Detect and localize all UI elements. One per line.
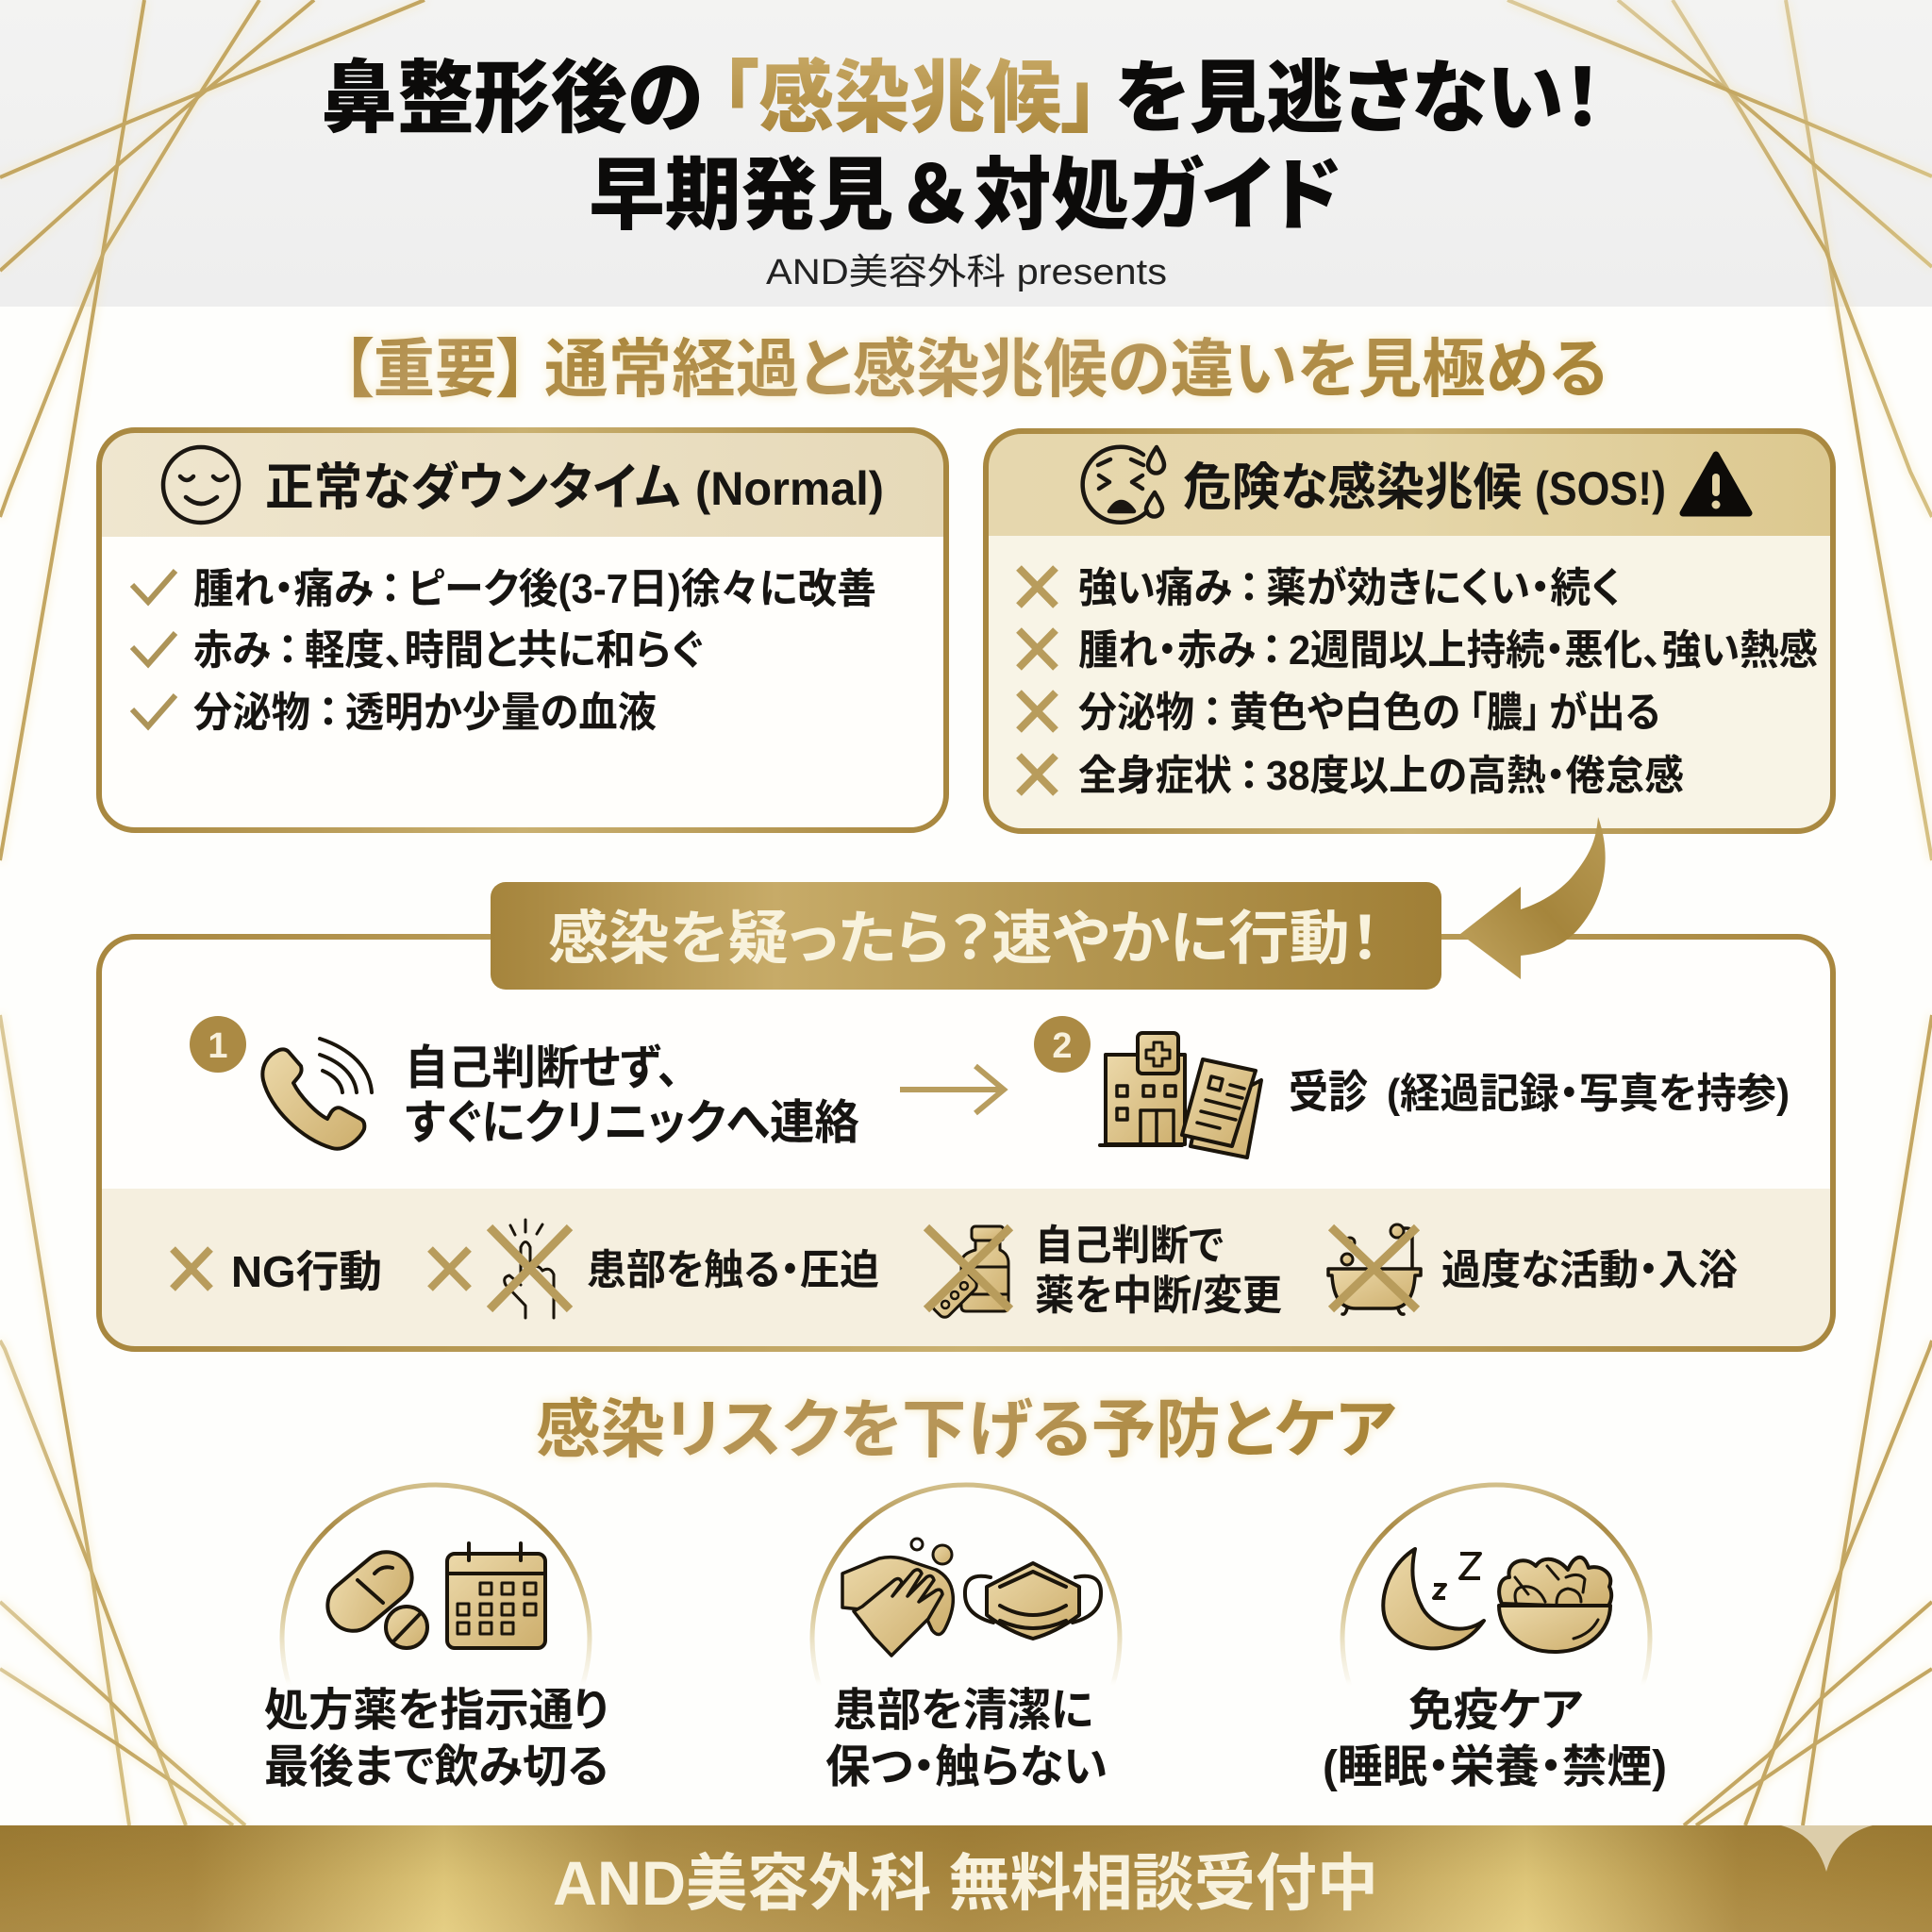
NG: touching	[430, 1220, 879, 1318]
care item: immunity	[1323, 1485, 1667, 1792]
icon: pills and calendar	[317, 1541, 545, 1648]
normal list: ：	[318, 690, 339, 736]
title: ＆	[903, 151, 967, 240]
danger list: が出る	[1549, 690, 1660, 736]
header band	[0, 0, 1932, 307]
NG: bathing	[1328, 1224, 1738, 1314]
danger list: ：	[1202, 690, 1223, 736]
badge: step 2	[1034, 1016, 1091, 1073]
NG: medicine: 薬を中断/変更	[1035, 1273, 1282, 1319]
icon: warning triangle	[1683, 455, 1749, 513]
hygiene caption	[825, 1686, 1108, 1792]
medicine caption: 最後まで飲み切る	[264, 1742, 608, 1792]
icon: calm face	[163, 447, 239, 523]
danger list: 薬が効きにくい・続く	[1266, 565, 1621, 611]
arrow: step 1 to step 2	[900, 1066, 1004, 1113]
normal list: 分泌物	[193, 690, 310, 736]
icon: medicine crossed out	[926, 1226, 1010, 1320]
NG: medicine: 自己判断で	[1035, 1223, 1224, 1269]
danger list: ：	[1261, 627, 1282, 674]
footer bar	[0, 1825, 1932, 1932]
step 2 text: (経過記録・写真を持参)	[1387, 1071, 1790, 1117]
panel: action steps	[99, 937, 1833, 1349]
hygiene caption: 保つ・触らない	[825, 1742, 1108, 1792]
hygiene caption: 患部を清潔に	[833, 1686, 1093, 1736]
panel: normal downtime	[99, 430, 946, 830]
section heading: prevention: 感染リスクを下げる予防とケア	[536, 1394, 1396, 1466]
banner: act quickly	[491, 882, 1441, 990]
normal list: 腫れ・痛み	[193, 566, 374, 612]
care item: hygiene	[812, 1485, 1120, 1792]
normal list	[132, 566, 876, 736]
NG band background	[99, 1189, 1833, 1349]
step 2 text: 受診	[1289, 1068, 1368, 1118]
panel: danger signs	[986, 431, 1833, 831]
NG: medicine	[926, 1223, 1282, 1320]
icon: finger touching crossed out	[490, 1220, 570, 1318]
title: 対処ガイド	[974, 151, 1341, 240]
normal list: ：	[277, 627, 298, 674]
title	[321, 54, 1602, 240]
danger list: 38度以上の高熱・倦怠感	[1266, 753, 1684, 799]
badge: step 1	[190, 1016, 246, 1073]
danger list	[1019, 565, 1818, 799]
immunity caption	[1323, 1686, 1667, 1792]
danger heading: (SOS!)	[1535, 462, 1666, 515]
danger heading: 危険な感染兆候	[1183, 459, 1522, 516]
banner: act quickly: 感染を疑ったら？速やかに行動！	[548, 907, 1380, 972]
medicine caption: 処方薬を指示通り	[264, 1686, 608, 1736]
medicine caption	[264, 1686, 608, 1792]
normal heading: 正常なダウンタイム	[265, 459, 680, 516]
normal list: ：	[380, 566, 401, 612]
icon: moon and salad	[1383, 1549, 1611, 1652]
step 1 text: 自己判断せず、	[405, 1041, 679, 1094]
danger list: 強い痛み	[1078, 565, 1232, 611]
danger list: 分泌物	[1078, 690, 1194, 736]
icon: phone	[262, 1039, 372, 1149]
danger list: 黄色や白色の	[1229, 690, 1460, 736]
section heading: differences: 通常経過と感染兆候の違いを見極める	[544, 334, 1607, 406]
title: を見逃さない！	[1115, 54, 1602, 142]
icon: hospital and documents	[1100, 1033, 1261, 1158]
section heading: differences: 【重要】	[342, 334, 527, 406]
icon: distressed face	[1083, 447, 1164, 523]
title: 早期発見	[589, 151, 893, 240]
danger list: 全身症状	[1078, 753, 1232, 799]
immunity caption: 免疫ケア	[1408, 1686, 1583, 1736]
immunity caption: (睡眠・栄養・禁煙)	[1323, 1742, 1667, 1792]
step 1 text	[405, 1041, 859, 1149]
NG: touching: 患部を触る・圧迫	[587, 1247, 879, 1293]
normal heading: (Normal)	[695, 462, 884, 515]
NG: bathing: 過度な活動・入浴	[1441, 1247, 1738, 1293]
danger list: ：	[1239, 753, 1259, 799]
title: 「感染兆候」	[721, 54, 1099, 142]
icon: washing hands and mask	[842, 1539, 1101, 1656]
badge: step 1: 1	[208, 1026, 228, 1066]
NG label: NG行動	[231, 1247, 382, 1296]
normal list: ピーク後(3-7日)徐々に改善	[408, 566, 876, 612]
footer bar: AND美容外科 無料相談受付中	[553, 1848, 1378, 1918]
icon: bath crossed out	[1328, 1224, 1421, 1314]
step 1 text: すぐにクリニックへ連絡	[405, 1096, 859, 1149]
care item: medicine	[264, 1485, 608, 1792]
badge: step 2: 2	[1052, 1026, 1073, 1066]
danger list: 2週間以上持続・悪化、強い熱感	[1289, 627, 1818, 674]
normal list: 赤み	[193, 627, 271, 674]
normal list: 軽度、時間と共に和らぐ	[305, 627, 703, 674]
subtitle: AND美容外科 presents	[766, 253, 1167, 292]
danger list: 「膿」	[1469, 690, 1541, 736]
danger list: ：	[1239, 565, 1259, 611]
title: 鼻整形後の	[321, 54, 703, 142]
normal list: 透明か少量の血液	[345, 690, 657, 736]
arrow: danger panel to action	[1460, 817, 1606, 979]
danger list: 腫れ・赤み	[1078, 627, 1256, 674]
